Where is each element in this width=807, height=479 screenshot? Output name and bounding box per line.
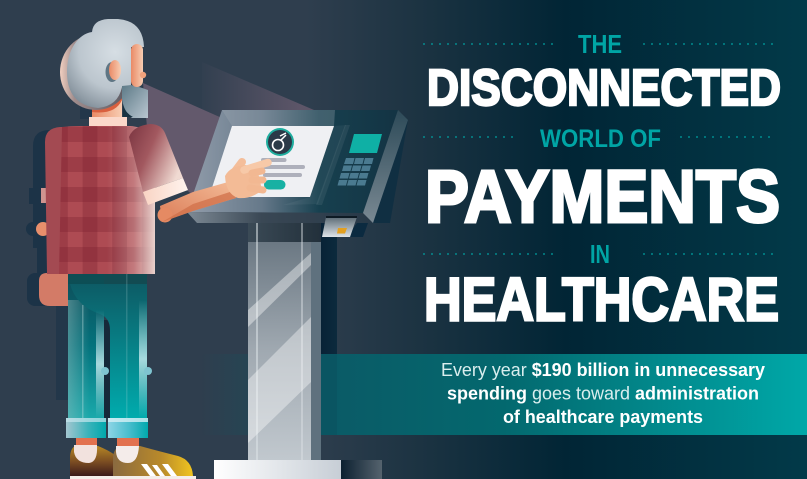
kiosk display <box>349 134 382 153</box>
figure shadow <box>26 105 120 418</box>
man: socks <box>76 438 139 446</box>
thumb <box>233 162 242 174</box>
title line: WORLD OF: WORLD OF <box>540 125 661 153</box>
banner text: Every year $190 billion in unnecessary <box>441 360 765 380</box>
man: shoes <box>70 445 196 479</box>
right shirt cuff <box>143 178 188 205</box>
kiosk screen <box>209 126 334 197</box>
banner text: spending goes toward administration <box>447 384 759 404</box>
screen button <box>264 180 286 190</box>
teal banner <box>200 354 807 435</box>
man: shirt <box>45 126 155 274</box>
banner text <box>441 360 765 427</box>
kiosk stand <box>248 223 337 460</box>
face <box>131 44 143 87</box>
logo badge <box>266 128 294 156</box>
banner text: of healthcare payments <box>503 407 703 427</box>
man: trouser cuffs <box>66 418 148 438</box>
decorative dotted rule: rows <box>424 44 773 254</box>
keypad <box>338 158 374 186</box>
pointing finger <box>244 162 268 170</box>
kiosk base <box>214 460 382 479</box>
kiosk head <box>187 110 408 223</box>
light beam from eye to kiosk <box>143 62 314 205</box>
man: head <box>60 19 148 118</box>
palm <box>225 165 262 198</box>
title line: THE: THE <box>578 29 622 59</box>
man: right forearm and hand <box>158 162 268 222</box>
man: trousers <box>68 273 152 418</box>
screen text lines <box>261 158 305 177</box>
man: left arm <box>36 188 68 306</box>
man: neck and collar <box>89 88 127 126</box>
left shirt cuff <box>41 188 58 203</box>
curled fingers <box>250 171 263 190</box>
glass reflection <box>283 125 346 205</box>
title line: IN: IN <box>590 239 610 269</box>
nose <box>140 72 146 78</box>
title <box>424 29 781 334</box>
left hand <box>39 273 68 306</box>
man: right sleeve <box>129 124 188 205</box>
ear <box>106 62 118 82</box>
beard <box>122 85 148 118</box>
card reader <box>322 216 368 237</box>
